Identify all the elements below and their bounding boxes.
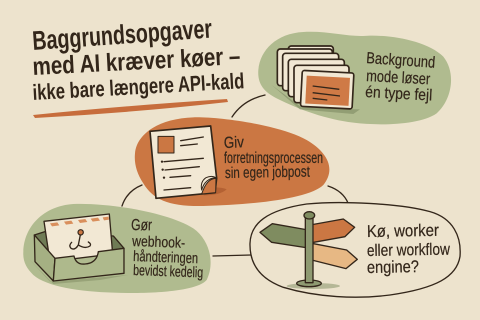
text: signpost: eller workflow bbox=[367, 241, 450, 260]
connector: inbox panel to signpost panel bbox=[213, 255, 251, 256]
icon: signpost bbox=[260, 212, 357, 289]
title: Baggrundsopgaver bbox=[31, 13, 213, 56]
text: business process: Giv bbox=[224, 134, 244, 152]
connector: green panel to orange panel bbox=[232, 95, 265, 117]
text: business process: sin egen jobpost bbox=[225, 164, 311, 182]
text: signpost: engine? bbox=[367, 257, 419, 277]
connector: orange panel to inbox panel bbox=[122, 185, 142, 206]
text: signpost bbox=[367, 221, 450, 277]
text: webhook handling: håndteringen bbox=[133, 248, 198, 267]
text: background mode bbox=[365, 50, 436, 105]
icon: document with curled corner bbox=[150, 126, 227, 198]
panel: background mode bbox=[258, 32, 451, 124]
text: background mode: mode løser bbox=[366, 68, 431, 88]
text: background mode: én type fejl bbox=[365, 84, 433, 105]
text: background mode: Background bbox=[366, 50, 436, 72]
text: business process bbox=[224, 134, 323, 182]
title: ikke bare længere API-kald bbox=[32, 68, 245, 105]
connector: orange panel to signpost panel bbox=[328, 186, 348, 203]
text: signpost: Kø, worker bbox=[367, 221, 439, 241]
text: business process: forretningsprocessen bbox=[224, 150, 323, 167]
text: webhook handling: webhook- bbox=[131, 233, 185, 252]
icon: inbox tray with hook envelope bbox=[28, 214, 128, 284]
title: med AI kræver køer – bbox=[32, 42, 241, 81]
panel: business process bbox=[135, 117, 329, 206]
panel: webhook handling bbox=[23, 204, 211, 293]
text: webhook handling: Gør bbox=[131, 217, 153, 234]
title underline bbox=[33, 99, 228, 118]
text: webhook handling bbox=[131, 217, 203, 281]
panel: signpost bbox=[250, 203, 460, 297]
icon: stack of cards bbox=[272, 46, 360, 114]
text: webhook handling: bevidst kedelig bbox=[133, 262, 203, 281]
title bbox=[31, 13, 245, 105]
